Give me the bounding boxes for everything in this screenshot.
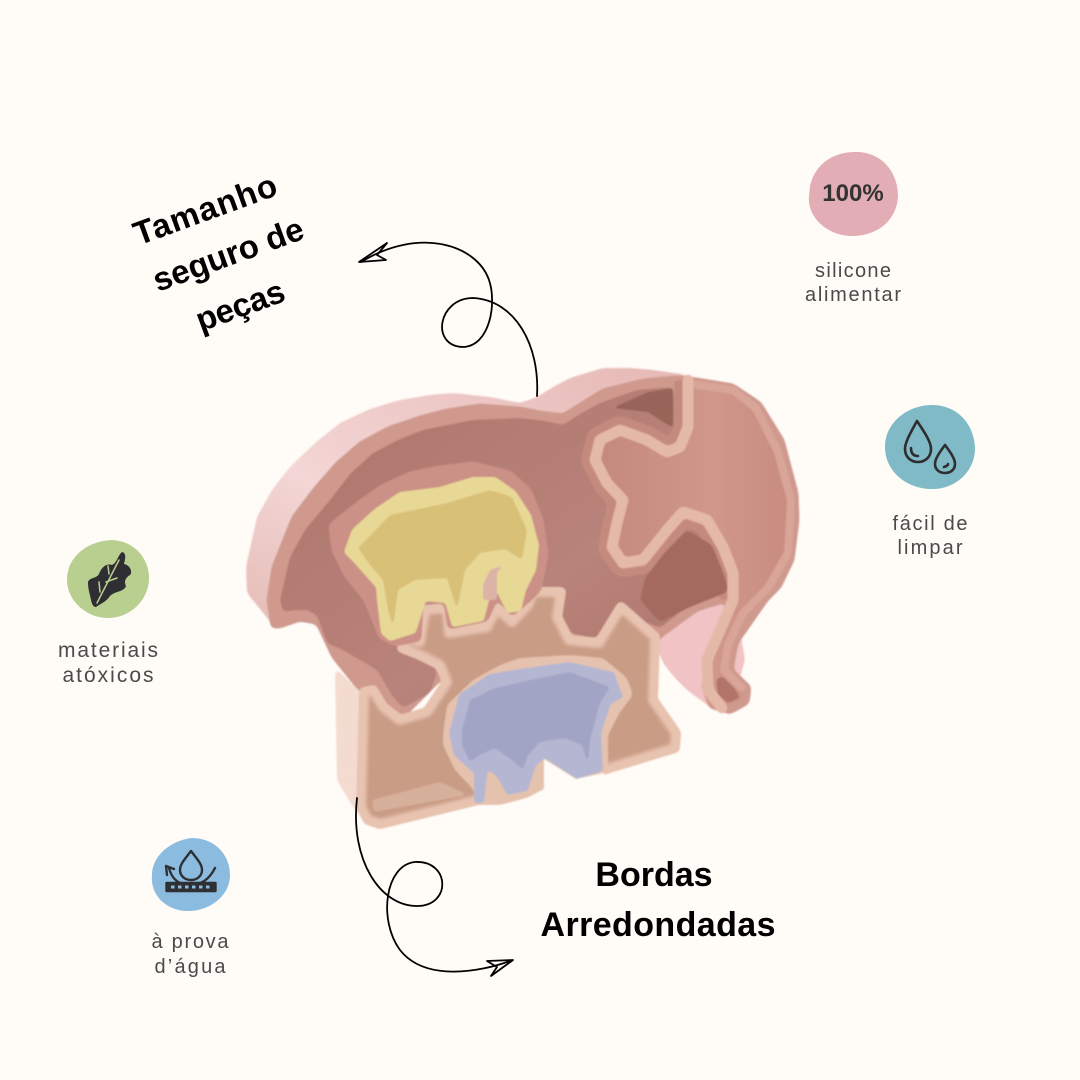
head piece peach edge — [595, 380, 733, 708]
yellow elephant halo — [330, 463, 547, 645]
caption: à prova — [152, 931, 229, 953]
leg back side — [335, 667, 375, 822]
blob: blue — [152, 838, 230, 911]
caption — [805, 260, 901, 306]
lilac elephant halo — [443, 655, 633, 805]
dark hollow under trunk — [640, 530, 728, 622]
heading: Tamanho seguro de peças — [128, 166, 309, 338]
arrow: to rounded edges heading — [356, 798, 513, 976]
outer silhouette rim — [268, 377, 798, 720]
elephant back side — [246, 368, 690, 625]
caption — [892, 513, 968, 559]
blob: green — [67, 540, 149, 618]
caption — [58, 639, 158, 687]
trunk back side — [658, 600, 745, 713]
dark pocket at top of body — [612, 388, 673, 428]
blob: teal — [885, 405, 975, 489]
gap between yellow legs — [483, 564, 506, 600]
lilac elephant inner — [462, 672, 610, 770]
percentage: 100% — [822, 180, 884, 207]
body piece inner — [280, 387, 735, 708]
icon: leaf — [88, 552, 131, 607]
leg floor highlight — [372, 782, 468, 812]
caption — [152, 931, 229, 978]
blob: pink — [809, 152, 898, 236]
caption: materiais — [58, 639, 158, 662]
badge: materiais atóxicos — [58, 540, 158, 687]
heading: Bordas Arredondadas: Arredondadas — [540, 906, 776, 944]
icon: waterproof membrane — [166, 851, 216, 891]
trunk tip hollow — [716, 676, 740, 703]
badge: à prova d'água — [152, 838, 230, 978]
caption: atóxicos — [62, 664, 154, 687]
caption: alimentar — [805, 284, 901, 306]
arrow: to safe parts size heading — [359, 243, 537, 396]
caption: d’água — [154, 956, 226, 978]
heading: Bordas Arredondadas — [540, 856, 776, 944]
lilac elephant piece — [450, 663, 622, 802]
icon: water drops — [905, 421, 955, 473]
caption: silicone — [815, 260, 891, 282]
heading: Tamanho seguro de peças: seguro de — [148, 210, 309, 299]
leg piece — [361, 592, 676, 824]
yellow elephant inner — [358, 490, 527, 628]
head piece halo — [595, 380, 733, 600]
head outer light rim — [692, 384, 791, 690]
caption: limpar — [898, 537, 963, 559]
notch between lilac legs — [480, 759, 606, 815]
heading: Tamanho seguro de peças: Tamanho — [128, 166, 282, 252]
product photo: silicone elephant puzzle — [246, 368, 798, 824]
heading: Tamanho seguro de peças: peças — [191, 272, 290, 338]
caption: fácil de — [892, 513, 968, 535]
heading: Bordas Arredondadas: Bordas — [595, 856, 713, 894]
yellow elephant piece — [345, 478, 538, 640]
badge: 100% silicone alimentar — [805, 152, 901, 306]
head and trunk piece — [595, 380, 793, 707]
badge: fácil de limpar — [885, 405, 975, 559]
